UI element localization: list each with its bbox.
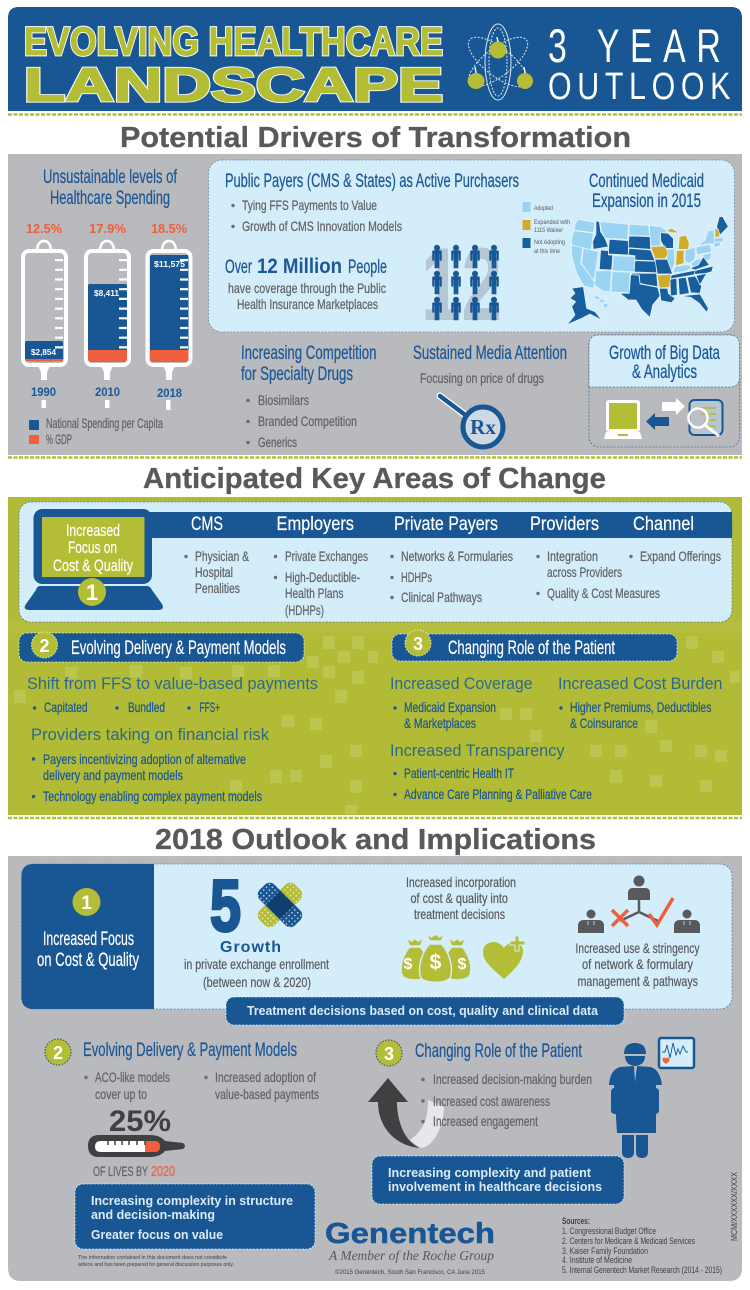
bag 1990: 1990 xyxy=(31,385,56,399)
employers bullets: Health Plans xyxy=(285,585,344,601)
stakeholder headers: Channel xyxy=(633,514,694,535)
sources: 1. Congressional Budget Office xyxy=(562,1226,656,1236)
delivery and payment text: Payers incentivizing adoption of alternative xyxy=(43,751,246,767)
changing role text: Increased Transparency xyxy=(390,741,565,760)
job code: MCM/XXXXXX/XXXX xyxy=(730,1171,739,1241)
5x growth stat: in private exchange enrollment xyxy=(184,956,329,972)
3 year outlook: OUTLOOK xyxy=(548,66,730,108)
public payers text: Public Payers (CMS & States) as Active Purchasers xyxy=(225,171,519,192)
changing role text: & Coinsurance xyxy=(570,715,638,731)
icon: money bags xyxy=(402,934,470,982)
sources: 2. Centers for Medicare & Medicaid Services xyxy=(562,1236,695,1246)
title: EVOLVING HEALTHCARE xyxy=(24,20,443,64)
icon: computer with number: Focus on xyxy=(68,538,117,557)
icon: decision tree of people xyxy=(578,876,700,933)
delivery and payment text: Capitated xyxy=(44,699,88,715)
bag 2018 xyxy=(148,241,190,410)
US map xyxy=(567,217,728,325)
delivery and payment text: Bundled xyxy=(128,699,165,715)
chart legend xyxy=(29,415,163,447)
5x growth stat xyxy=(184,866,329,990)
icon: computer with number xyxy=(25,509,163,610)
healthcare spending chart: 18.5% xyxy=(151,221,187,236)
stakeholder headers: CMS xyxy=(191,514,223,535)
public payers text: Tying FFS Payments to Value xyxy=(242,197,377,213)
delivery and payment text: FFS+ xyxy=(200,699,220,715)
media attention xyxy=(413,343,567,447)
delivery and payment text: delivery and payment models xyxy=(43,767,183,783)
bag 2010: 2010 xyxy=(95,385,120,399)
bag 1990 xyxy=(23,241,66,408)
title: LANDSCAPE xyxy=(24,58,443,111)
icon: patient in gown xyxy=(609,1043,662,1158)
5x growth stat: 5 xyxy=(210,866,241,947)
changing role text xyxy=(390,674,722,802)
icon: laptop xyxy=(604,400,642,439)
header banner xyxy=(8,7,742,111)
5x growth stat: (between now & 2020) xyxy=(203,974,311,990)
delivery and payment text: Technology enabling complex payment models xyxy=(43,788,262,804)
section: changing role of the patient outlook: 3 xyxy=(384,1044,394,1064)
icon: document and magnifier xyxy=(688,400,722,436)
pill: changing role of the patient xyxy=(392,630,677,661)
panel: potential drivers xyxy=(8,154,742,455)
sources: 4. Institute of Medicine xyxy=(562,1255,632,1265)
heading: 2018 outlook: 2018 Outlook and Implications xyxy=(155,824,596,856)
map legend: Expanded with xyxy=(534,219,570,226)
private payers bullets: Networks & Formularies xyxy=(401,548,513,564)
map legend: Adopted xyxy=(534,205,553,212)
panel: big data: & Analytics xyxy=(632,362,697,383)
CMS bullets: Hospital xyxy=(195,564,233,580)
icon: heart with plus xyxy=(483,936,525,979)
delivery and payment text: Shift from FFS to value-based payments xyxy=(27,674,318,693)
specialty drugs competition xyxy=(241,343,376,450)
12 million people text: Over xyxy=(225,257,252,278)
logo: Genentech: ©2015 Genentech, South San Francisco, CA June 2015 xyxy=(335,1268,485,1276)
icon: Rx magnifier xyxy=(440,396,503,447)
changing role text: Advance Care Planning & Palliative Care xyxy=(404,786,592,802)
section: changing role of the patient outlook: Increased cost awareness xyxy=(433,1093,550,1109)
specialty drugs competition: Biosimilars xyxy=(258,392,309,408)
public payers text xyxy=(225,171,519,234)
employers bullets: High-Deductible- xyxy=(285,569,360,585)
pill: treatment decisions xyxy=(226,997,624,1025)
title xyxy=(24,20,443,111)
disclaimer: The information contained in this document does not constitute xyxy=(78,1255,227,1261)
pill: delivery and payment models: Evolving Delivery & Payment Models xyxy=(71,638,286,659)
blue label with number: 1 xyxy=(81,893,92,914)
12 million people text: Health Insurance Marketplaces xyxy=(237,296,378,312)
map legend: 1115 Waiver xyxy=(534,227,564,234)
providers bullets: across Providers xyxy=(547,564,622,580)
stakeholder headers xyxy=(191,514,694,535)
map legend: at this time xyxy=(534,248,560,255)
callout: complexity in structure: Increasing complexity in structure xyxy=(91,1194,293,1208)
sources: Sources: xyxy=(562,1216,590,1226)
icon: crossed bandages xyxy=(255,880,305,930)
pill: changing role of the patient: 3 xyxy=(413,634,423,654)
logo: Genentech: Genentech xyxy=(325,1218,495,1250)
employers bullets: (HDHPs) xyxy=(285,602,324,618)
icon: heart monitor xyxy=(659,1038,694,1068)
panel: big data xyxy=(589,335,740,447)
bag 2018: $11,575 xyxy=(154,259,185,269)
providers bullets: Quality & Cost Measures xyxy=(547,585,660,601)
icon: computer with number: Cost & Quality xyxy=(53,556,133,575)
chart legend: National Spending per Capita xyxy=(46,415,163,431)
callout: complexity in structure: and decision-making xyxy=(91,1208,215,1222)
providers bullets xyxy=(536,548,660,601)
network and formulary management: Increased use & stringency xyxy=(576,940,700,956)
network and formulary management xyxy=(576,876,700,989)
blue label with number: Increased Focus xyxy=(43,929,134,950)
heading: Medicaid expansion: Expansion in 2015 xyxy=(592,191,701,212)
12 million people text: People xyxy=(348,257,387,278)
callout: complexity in structure: Greater focus on value xyxy=(91,1228,223,1242)
healthcare spending chart xyxy=(23,167,190,447)
cost and quality incorporation: Increased incorporation xyxy=(406,874,516,890)
changing role text: Patient-centric Health IT xyxy=(404,765,514,781)
cost and quality incorporation: treatment decisions xyxy=(414,906,505,922)
caption: of lives by 2020: 2020 xyxy=(151,1163,175,1180)
changing role text: Increased Coverage xyxy=(390,674,532,693)
panel: cost and quality outlook xyxy=(22,864,732,1025)
callout: complexity in structure xyxy=(75,1184,315,1249)
blue label with number: on Cost & Quality xyxy=(37,950,139,971)
icon: money bags: $ xyxy=(430,951,442,974)
logo: Genentech: A Member of the Roche Group xyxy=(328,1249,494,1264)
CMS bullets: Penalities xyxy=(195,580,240,596)
icon: money bags: $ xyxy=(458,956,467,973)
icon: computer with number: 1 xyxy=(86,580,98,605)
5x growth stat: Growth xyxy=(220,939,281,956)
delivery and payment text xyxy=(27,674,318,804)
stat: 25 percent: 25% xyxy=(109,1105,171,1138)
heading: drivers: Potential Drivers of Transformation xyxy=(120,122,631,154)
icon: computer with number: Increased xyxy=(66,521,120,540)
channel bullets: Expand Offerings xyxy=(640,548,721,564)
private payers bullets: Clinical Pathways xyxy=(401,589,482,605)
stakeholder headers: Employers xyxy=(276,514,354,535)
private payers bullets xyxy=(390,548,513,605)
logo: Genentech xyxy=(325,1218,495,1276)
changing role text: & Marketplaces xyxy=(404,715,476,731)
sources: 3. Kaiser Family Foundation xyxy=(562,1246,648,1256)
CMS bullets: Physician & xyxy=(195,548,249,564)
section: delivery and payment models outlook xyxy=(45,1039,319,1268)
cost and quality incorporation xyxy=(402,874,525,982)
callout: complexity and patient involvement: Increasing complexity and patient xyxy=(388,1166,592,1180)
section: delivery and payment models outlook: Increased adoption of xyxy=(215,1069,316,1085)
pill: delivery and payment models: 2 xyxy=(39,636,50,656)
heading: key areas of change: Anticipated Key Areas of Change xyxy=(143,463,606,495)
private payers bullets: HDHPs xyxy=(401,569,432,585)
12 million people text: 12 Million xyxy=(257,255,342,278)
section: delivery and payment models outlook: 2 xyxy=(53,1043,63,1063)
public payers text: Growth of CMS Innovation Models xyxy=(242,218,402,234)
panel: public payers and Medicaid xyxy=(208,160,734,343)
healthcare spending chart: 12.5% xyxy=(26,221,62,236)
caption: of lives by 2020: OF LIVES BY xyxy=(93,1163,148,1179)
section: delivery and payment models outlook: ACO-like models xyxy=(95,1069,170,1085)
section: changing role of the patient outlook: Increased decision-making burden xyxy=(433,1071,592,1087)
media attention: Sustained Media Attention xyxy=(413,343,567,364)
panel: key areas of change xyxy=(8,497,742,815)
blue label with number xyxy=(37,888,139,971)
map legend: Not Adopting xyxy=(534,239,565,246)
title: LANDSCAPE xyxy=(24,58,443,111)
cost and quality incorporation: of cost & quality into xyxy=(410,890,508,906)
icon: 12 people: 12 xyxy=(421,227,502,343)
delivery and payment text: Providers taking on financial risk xyxy=(31,725,269,744)
changing role text: Increased Cost Burden xyxy=(558,674,722,693)
12 million people text: have coverage through the Public xyxy=(228,280,386,296)
changing role text: Medicaid Expansion xyxy=(404,699,496,715)
sources xyxy=(562,1216,722,1275)
pill: treatment decisions: Treatment decisions based on cost, quality and clinical data xyxy=(247,1004,599,1018)
callout: complexity and patient involvement xyxy=(372,1156,624,1204)
3 year outlook xyxy=(548,20,730,108)
network and formulary management: management & pathways xyxy=(578,973,698,989)
section: delivery and payment models outlook: cover up to xyxy=(95,1086,147,1102)
heading: Medicaid expansion xyxy=(589,171,704,212)
3 year outlook: 3 YEAR xyxy=(548,20,721,72)
section: changing role of the patient outlook: Increased engagement xyxy=(433,1113,538,1129)
section: changing role of the patient outlook xyxy=(368,1038,694,1204)
employers bullets xyxy=(274,548,368,618)
section: delivery and payment models outlook: Evolving Delivery & Payment Models xyxy=(83,1040,297,1061)
12 million people text xyxy=(225,255,387,312)
icon: atom with apples xyxy=(461,24,535,100)
network and formulary management: of network & formulary xyxy=(582,956,693,972)
specialty drugs competition: Increasing Competition xyxy=(241,343,376,364)
specialty drugs competition: Generics xyxy=(258,434,297,450)
icon: money bags: $ xyxy=(404,956,413,973)
callout: complexity and patient involvement: involvement in healthcare decisions xyxy=(388,1180,602,1194)
map legend xyxy=(522,202,570,255)
icon: Rx magnifier: Rx xyxy=(470,415,496,439)
employers bullets: Private Exchanges xyxy=(285,548,368,564)
bag 2018: 2018 xyxy=(157,386,182,400)
specialty drugs competition: Branded Competition xyxy=(258,413,357,429)
bag 2010: $8,411 xyxy=(94,288,119,298)
healthcare spending chart: 17.9% xyxy=(89,221,126,236)
icon: thermometer xyxy=(88,1135,185,1157)
media attention: Focusing on price of drugs xyxy=(420,370,544,386)
providers bullets: Integration xyxy=(547,548,598,564)
stakeholder headers: Private Payers xyxy=(394,514,498,535)
chart legend: % GDP xyxy=(46,431,72,447)
healthcare spending chart: Healthcare Spending xyxy=(50,188,170,209)
CMS bullets xyxy=(184,548,249,596)
pill: changing role of the patient: Changing Role of the Patient xyxy=(448,638,615,659)
title: EVOLVING HEALTHCARE xyxy=(24,20,443,64)
panel: increased focus on cost and quality xyxy=(19,502,732,622)
panel: 2018 outlook xyxy=(8,856,742,1281)
disclaimer: advice and has been prepared for general discussion purposes only. xyxy=(78,1262,234,1268)
bag 1990: $2,854 xyxy=(31,347,56,357)
bag 2010 xyxy=(86,241,129,408)
section: delivery and payment models outlook: value-based payments xyxy=(215,1086,319,1102)
disclaimer xyxy=(78,1255,234,1268)
stakeholder headers: Providers xyxy=(530,514,599,535)
channel bullets xyxy=(629,548,721,564)
pill: delivery and payment models xyxy=(19,632,304,662)
icon: curved up arrow xyxy=(368,1078,444,1148)
section: changing role of the patient outlook: Changing Role of the Patient xyxy=(415,1041,582,1062)
icon: exchange arrows xyxy=(646,398,685,430)
healthcare spending chart: Unsustainable levels of xyxy=(43,167,177,188)
specialty drugs competition: for Specialty Drugs xyxy=(241,364,353,385)
